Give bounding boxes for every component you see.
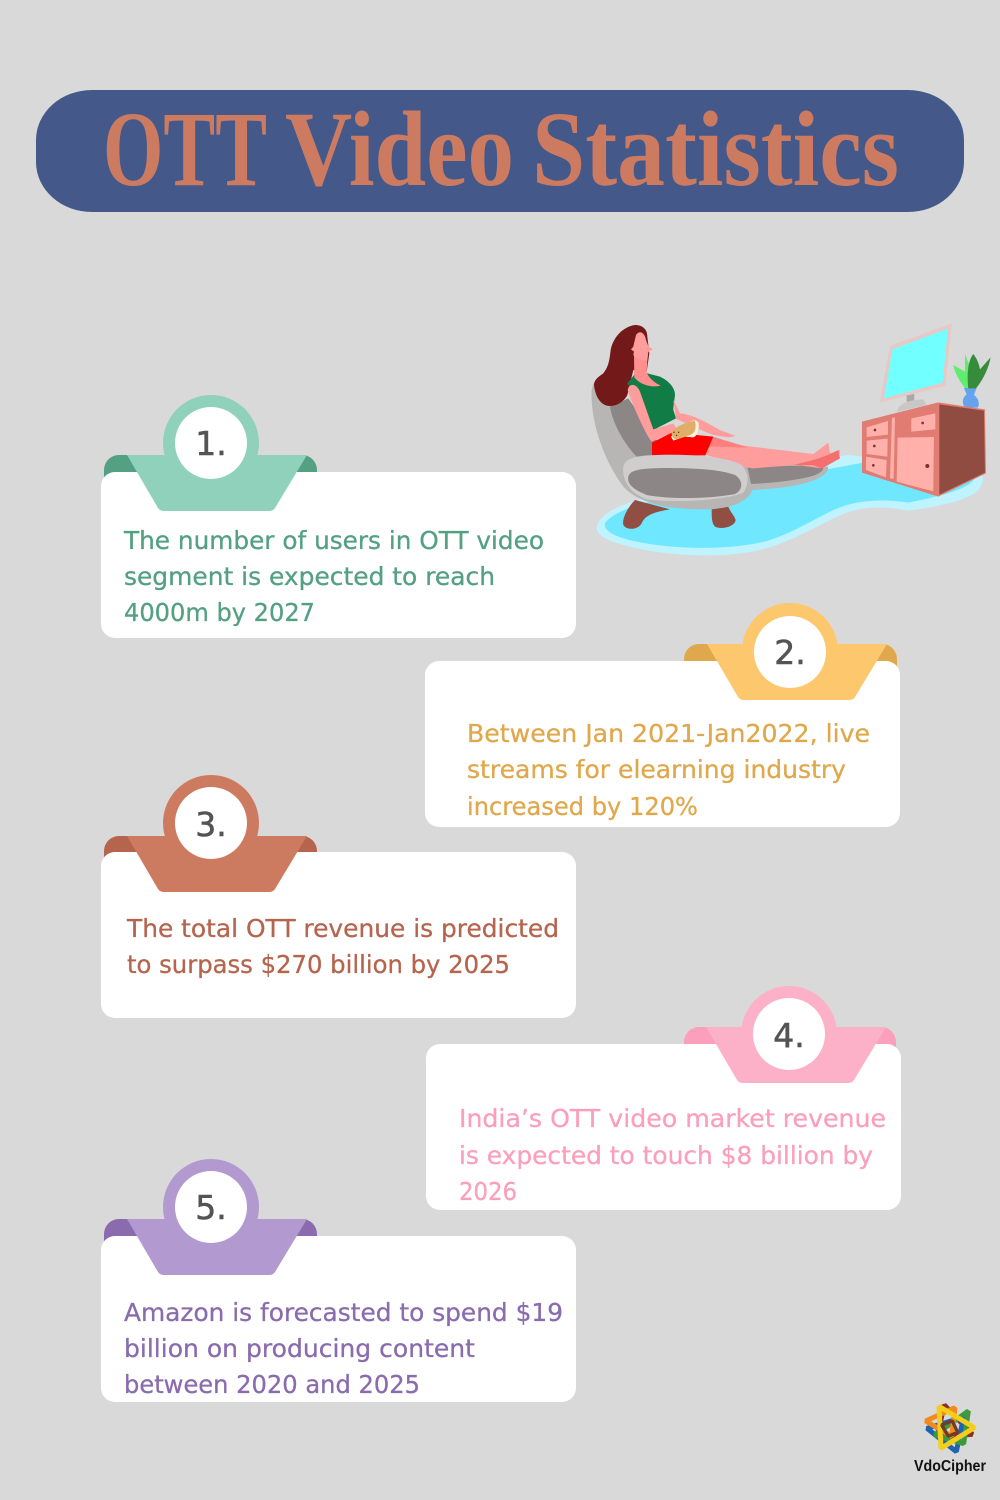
badge number: 2.	[774, 633, 806, 672]
body text	[126, 914, 559, 979]
badge shape	[707, 603, 887, 700]
body text	[123, 526, 544, 627]
neck and chest	[634, 355, 661, 386]
green top	[627, 373, 676, 430]
title banner: Statistics	[532, 91, 899, 209]
body text	[467, 719, 870, 821]
title banner: Video	[285, 91, 514, 209]
logo: VdoCipher	[914, 1405, 986, 1475]
body text: Amazon is forecasted to spend $19	[124, 1298, 563, 1327]
badge tab	[684, 644, 897, 684]
card	[101, 852, 576, 1018]
logo wordmark: VdoCipher	[914, 1458, 986, 1475]
near arm	[628, 385, 677, 442]
cat	[671, 420, 699, 441]
thigh shade	[705, 437, 748, 447]
body text: The number of users in OTT video	[123, 526, 544, 555]
title banner: OTT	[103, 91, 267, 209]
legs	[706, 443, 840, 468]
body text	[459, 1104, 886, 1206]
card	[101, 1236, 576, 1402]
badge shape	[127, 1159, 307, 1275]
hair	[594, 325, 649, 406]
badge shape	[127, 395, 307, 511]
body text: India’s OTT video market revenue	[459, 1104, 886, 1133]
card	[101, 472, 576, 638]
body text: billion on producing content	[124, 1334, 475, 1363]
body text: to surpass $270 billion by 2025	[127, 950, 510, 979]
plant	[963, 388, 979, 408]
body text: 2026	[459, 1177, 517, 1206]
badge tab	[104, 1219, 317, 1259]
body text: Between Jan 2021-Jan2022, live	[467, 719, 870, 748]
illustration: woman watching TV	[592, 323, 991, 555]
badge number: 3.	[195, 805, 227, 844]
body text: segment is expected to reach	[124, 562, 495, 591]
card	[426, 1044, 901, 1210]
badge tab	[104, 836, 317, 876]
footrest	[743, 467, 828, 490]
badge number: 4.	[773, 1016, 805, 1055]
chair legs	[623, 500, 736, 529]
badge number: 5.	[195, 1188, 227, 1227]
panel 2: live streams	[425, 603, 900, 827]
badge tab	[684, 1027, 896, 1067]
panel 4: India	[426, 986, 901, 1210]
badge number: 1.	[195, 424, 227, 463]
body text: streams for elearning industry	[467, 755, 846, 784]
chair arm	[623, 455, 748, 501]
TV	[880, 323, 952, 403]
body text	[124, 1298, 563, 1399]
far arm	[673, 400, 736, 437]
red dress	[652, 433, 713, 455]
title banner	[36, 90, 964, 212]
woman upper body	[594, 325, 748, 455]
body text: The total OTT revenue is predicted	[126, 914, 559, 943]
panel 3: revenue	[101, 775, 576, 1018]
badge shape	[127, 775, 307, 892]
body text: 4000m by 2027	[124, 598, 315, 627]
card	[425, 661, 900, 827]
badge tab	[104, 455, 317, 495]
chair back	[592, 383, 752, 509]
badge shape	[706, 986, 886, 1083]
body text: increased by 120%	[467, 792, 698, 821]
rug	[597, 455, 983, 555]
body text: is expected to touch $8 billion by	[459, 1141, 873, 1170]
face	[631, 332, 653, 361]
body text: between 2020 and 2025	[124, 1370, 420, 1399]
cabinet	[862, 402, 986, 497]
panel 1: users	[101, 395, 576, 638]
panel 5: Amazon	[101, 1159, 576, 1402]
